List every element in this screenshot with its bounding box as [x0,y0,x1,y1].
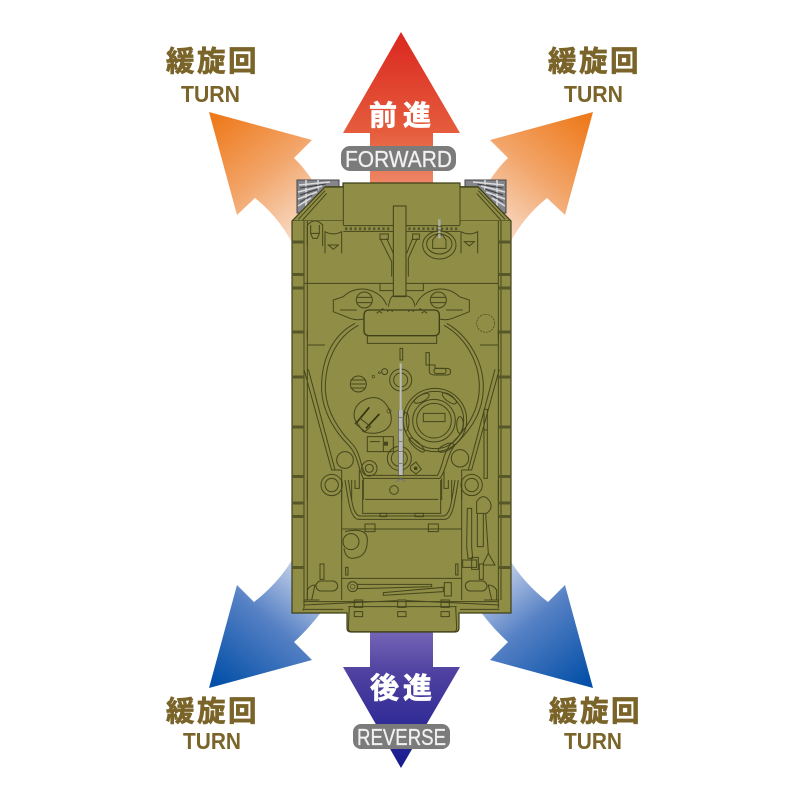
label: forward english pill: FORWARD [345,146,452,172]
pistol port and fittings [350,348,451,392]
turret side lobes [333,289,387,320]
fender tie-down bars [292,240,511,569]
upper hull details [292,183,511,340]
label: turn bottom left english: TURN [183,728,241,754]
turret [304,323,501,500]
label: forward japanese: 前進 [369,100,437,131]
periscope guards [307,221,478,253]
commander cupola [403,388,467,454]
hull silhouette [292,183,511,632]
mantlet [364,310,439,336]
left track end [297,180,339,213]
label: reverse japanese: 後進 [370,672,436,705]
label: turn top right english: TURN [564,81,623,107]
label: turn top left japanese: 緩旋回 [166,46,259,78]
side bins [304,330,501,500]
antenna mount [390,363,405,494]
gun barrel [393,206,406,297]
arrow: turn reverse left [209,545,330,688]
tow struts [380,238,417,277]
front hatch mount [423,219,456,259]
shovel and tools [463,497,495,569]
rear hull [303,480,501,632]
label: turn bottom right english: TURN [564,728,622,754]
arrow: turn forward right [472,112,593,260]
arrow: turn reverse right [472,545,593,688]
right bin tube [484,409,487,478]
arrow: turn forward left [209,112,330,260]
engine deck vents [321,450,482,500]
tank top view [292,180,511,632]
stowage ring [343,530,458,575]
label: turn top left english: TURN [181,81,240,107]
rear brackets [354,600,449,617]
wrench and hammer [348,582,451,596]
arrow: reverse [343,625,460,768]
loader hatch [354,398,391,433]
hull side fittings [303,564,499,600]
label: turn bottom right japanese: 緩旋回 [549,696,642,728]
periscope box [367,437,393,452]
label: reverse english pill: REVERSE [357,724,446,750]
arrow: forward [343,32,460,190]
label: turn top right japanese: 緩旋回 [548,46,641,78]
right track end [465,180,506,213]
label: turn bottom left japanese: 緩旋回 [166,696,259,728]
